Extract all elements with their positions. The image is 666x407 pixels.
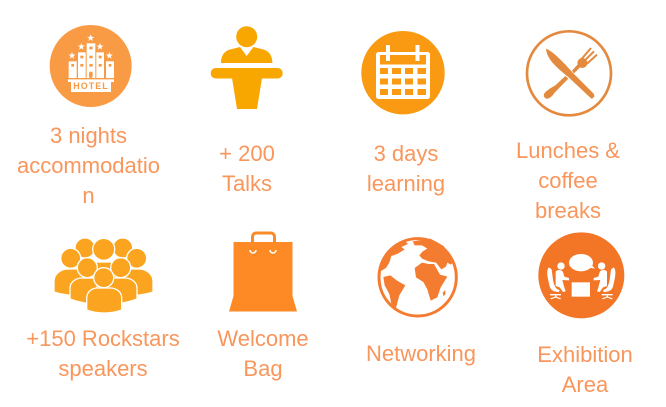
text: +200 Talks [219,141,275,196]
text: +200 Talks: Talks [222,171,272,196]
icon: exhibition meeting [538,232,624,318]
icon: welcome bag [229,233,297,312]
text: +200 Talks: + 200 [219,141,275,166]
icon: group of speakers [54,238,153,313]
icon: knife and fork [527,31,611,115]
text: 3 nights accommodation: n [82,183,95,208]
text: lunches and coffee breaks: coffee [538,168,598,193]
icon: hotel: HOTEL [73,81,109,91]
text: 3 days learning: learning [367,171,445,196]
text: 3 days learning [367,141,445,196]
icon: hotel [50,25,132,107]
text: networking: Networking [366,341,476,366]
text: exhibition area: Exhibition [537,342,633,367]
text: lunches and coffee breaks: breaks [535,198,601,223]
text: +150 Rockstars speakers: +150 Rockstars [26,326,180,351]
text: exhibition area: Area [562,372,608,397]
text: welcome bag [217,326,309,381]
text: 3 days learning: 3 days [374,141,438,166]
text: lunches and coffee breaks [516,138,620,223]
text: 3 nights accommodation [17,123,160,208]
text: 3 nights accommodation: 3 nights [50,123,127,148]
icon: calendar [361,31,445,114]
text: welcome bag: Welcome [217,326,309,351]
icon: globe [379,239,456,316]
icon: speaker at lectern [211,26,283,109]
text: +150 Rockstars speakers: speakers [58,356,148,381]
text: lunches and coffee breaks: Lunches & [516,138,620,163]
text: welcome bag: Bag [243,356,283,381]
text: 3 nights accommodation: accommodatio [17,153,160,178]
text: +150 Rockstars speakers [26,326,180,381]
text: exhibition area [537,342,633,397]
